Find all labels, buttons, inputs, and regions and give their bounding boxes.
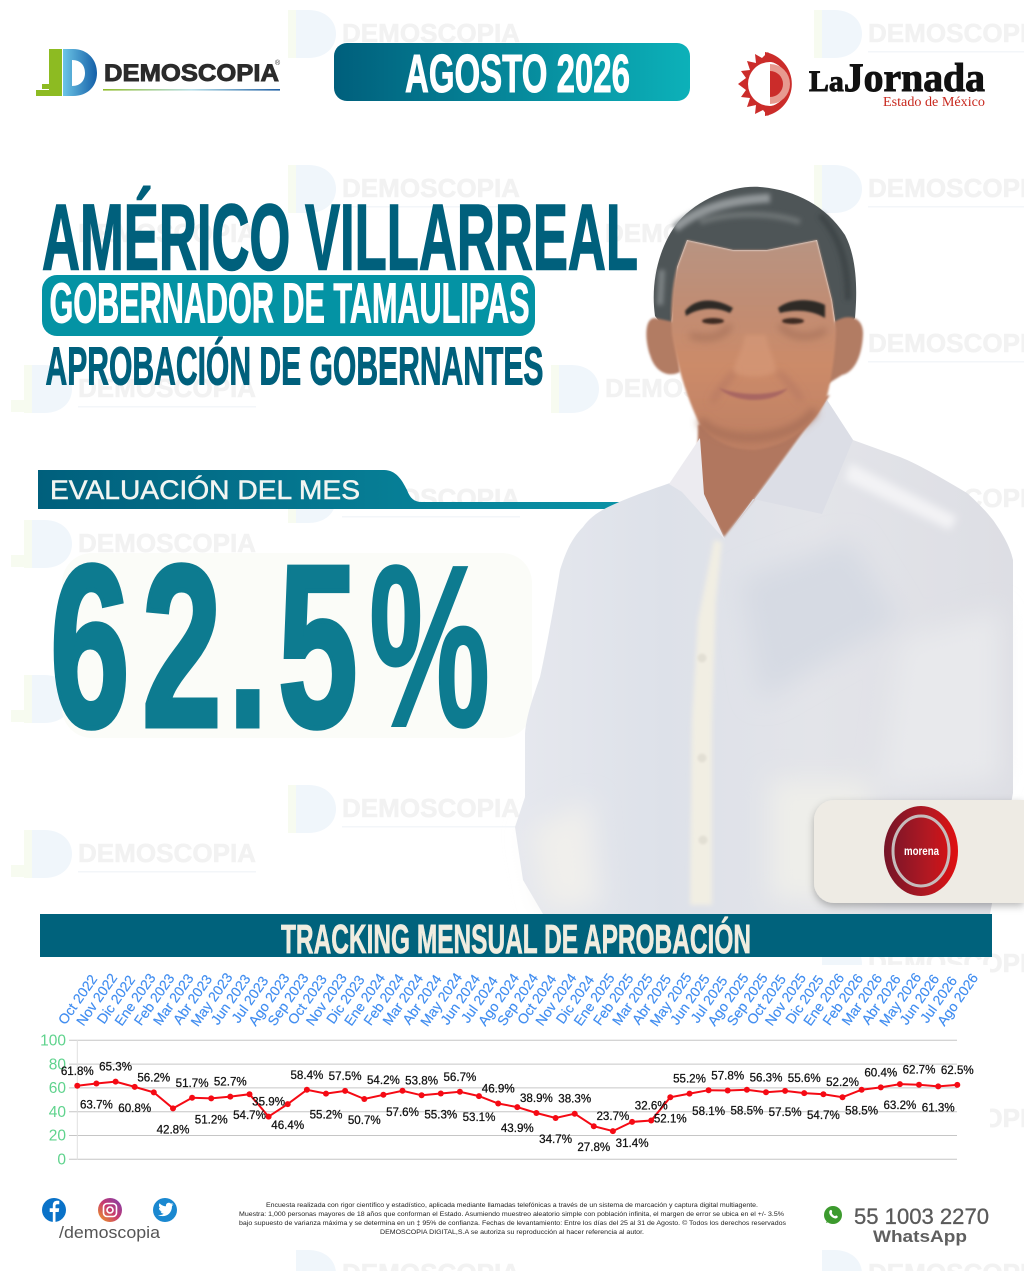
hair bbox=[654, 187, 856, 340]
subtitle pill: Gobernador de Tamaulipas: GOBERNADOR DE TAMAULIPAS bbox=[50, 272, 530, 336]
line chart: monthly approval tracking bbox=[40, 965, 990, 1170]
x axis labels: May 2023 bbox=[187, 969, 236, 1029]
x axis labels: Jul 2024 bbox=[457, 973, 501, 1026]
x axis labels: Ago 2025 bbox=[704, 970, 752, 1029]
big number: 62.5% bbox=[50, 517, 490, 776]
data labels: 32.6% bbox=[635, 1100, 668, 1112]
collar left bbox=[669, 438, 725, 540]
heading: Aprobación de gobernantes: APROBACIÓN DE GOBERNANTES bbox=[46, 336, 544, 396]
chart header bar bbox=[40, 914, 992, 962]
data labels: 53.8% bbox=[405, 1074, 438, 1087]
handle: /demoscopia bbox=[59, 1223, 161, 1242]
x axis labels: Jul 2025 bbox=[687, 973, 731, 1026]
x axis labels: Abr 2023 bbox=[169, 971, 215, 1027]
data labels: 65.3% bbox=[99, 1061, 132, 1074]
watermark pattern: DEMOSCOPIA bbox=[342, 483, 520, 513]
data labels: 54.2% bbox=[367, 1074, 400, 1087]
watermark pattern: DEMOSCOPIA bbox=[342, 18, 520, 48]
big number: 62.5%: 2 bbox=[142, 517, 222, 775]
x axis labels: Ene 2023 bbox=[111, 970, 159, 1029]
data labels: 34.7% bbox=[539, 1133, 572, 1146]
x axis labels: Sep 2023 bbox=[264, 970, 312, 1029]
x axis labels: Ago 2026 bbox=[934, 970, 981, 1029]
x axis labels: Feb 2023 bbox=[130, 970, 178, 1028]
x axis labels: Oct 2025 bbox=[743, 971, 789, 1027]
x axis labels: Ago 2024 bbox=[475, 970, 522, 1029]
data labels: 38.3% bbox=[558, 1093, 591, 1106]
watermark pattern: DEMOSCOPIA bbox=[78, 838, 256, 868]
x axis labels: Ene 2025 bbox=[570, 970, 618, 1029]
data labels bbox=[61, 1061, 974, 1154]
data labels: 58.1% bbox=[692, 1105, 725, 1118]
panel: party badge bbox=[814, 800, 1024, 903]
x axis labels: Abr 2024 bbox=[399, 971, 445, 1027]
data labels: 46.9% bbox=[482, 1082, 515, 1096]
x axis labels: Jul 2026 bbox=[917, 973, 960, 1026]
data labels: 38.9% bbox=[520, 1092, 553, 1105]
data labels: 58.4% bbox=[290, 1069, 323, 1082]
x axis labels: Nov 2025 bbox=[762, 970, 809, 1029]
data labels: 57.5% bbox=[329, 1070, 362, 1083]
data labels: 61.8% bbox=[61, 1065, 94, 1078]
x axis labels bbox=[55, 969, 981, 1029]
data labels: 23.7% bbox=[596, 1110, 629, 1123]
data labels: 27.8% bbox=[577, 1141, 610, 1154]
logo: La Jornada bbox=[738, 52, 985, 116]
hair highlights bbox=[660, 198, 848, 305]
x axis labels: May 2025 bbox=[646, 969, 695, 1029]
data labels: 54.7% bbox=[233, 1109, 266, 1122]
data labels: 52.7% bbox=[214, 1076, 247, 1089]
contact: WhatsApp bbox=[824, 1204, 989, 1246]
x axis labels: Mar 2023 bbox=[150, 970, 197, 1028]
data line bbox=[77, 1082, 957, 1131]
x axis labels: Oct 2024 bbox=[514, 971, 560, 1027]
x axis labels: Nov 2023 bbox=[302, 970, 350, 1029]
x axis labels: Sep 2025 bbox=[723, 970, 771, 1029]
nose bbox=[734, 335, 776, 377]
x axis labels: Feb 2026 bbox=[819, 970, 866, 1028]
data labels: 61.3% bbox=[922, 1101, 955, 1114]
icon: morena logo: morena bbox=[904, 846, 940, 858]
icon: facebook bbox=[42, 1198, 66, 1222]
data labels: 31.4% bbox=[616, 1137, 649, 1150]
watermark pattern: DEMOSCOPIA bbox=[342, 173, 520, 203]
data labels: 58.5% bbox=[730, 1105, 763, 1118]
methodology note: bajo supuesto de varianza máxima y se determina en un ‡ 95% de confianza. Fechas de levantamiento: Entre los días del 25 al 31 de Agosto. © Todos los derechos reservados bbox=[239, 1219, 787, 1227]
contact: WhatsApp: 55 1003 2270 bbox=[854, 1204, 989, 1229]
gridlines bbox=[69, 1040, 957, 1160]
logo: La Jornada: LaJornada bbox=[809, 55, 985, 100]
date pill: Agosto 2026: AGOSTO 2026 bbox=[405, 44, 630, 104]
y axis labels: 80 bbox=[49, 1056, 66, 1073]
watermark pattern: DEMOSCOPIA bbox=[78, 218, 256, 248]
placket bbox=[690, 540, 722, 905]
y axis labels: 0 bbox=[57, 1152, 66, 1168]
y axis labels: 40 bbox=[49, 1104, 66, 1121]
photo: governor in white shirt bbox=[515, 187, 1013, 914]
data labels: 51.7% bbox=[176, 1077, 209, 1090]
x axis labels: Jun 2025 bbox=[667, 971, 713, 1028]
mouth bbox=[719, 388, 788, 400]
data labels: 60.4% bbox=[864, 1066, 897, 1079]
data labels: 54.7% bbox=[807, 1109, 840, 1122]
data labels: 56.3% bbox=[750, 1071, 782, 1084]
tab: Evaluación del mes: EVALUACIÓN DEL MES bbox=[50, 474, 360, 505]
x axis labels: Dic 2023 bbox=[323, 972, 368, 1027]
watermark pattern: DEMOSCOPIA bbox=[605, 373, 783, 403]
big number: 62.5%: 5 bbox=[278, 517, 358, 775]
face bbox=[671, 240, 836, 450]
x axis labels: Ago 2023 bbox=[245, 970, 293, 1029]
x axis labels: Oct 2022 bbox=[55, 971, 100, 1027]
x axis labels: Abr 2026 bbox=[858, 971, 904, 1027]
data labels: 35.9% bbox=[252, 1096, 285, 1109]
data labels: 55.6% bbox=[788, 1072, 821, 1085]
ears bbox=[646, 318, 680, 374]
watermark pattern: DEMOSCOPIA bbox=[342, 793, 520, 823]
watermark pattern: DEMOSCOPIA bbox=[78, 373, 256, 403]
icon: instagram bbox=[98, 1198, 122, 1222]
big number: 62.5%: % bbox=[369, 518, 490, 776]
logo: Demoscopia bbox=[36, 49, 281, 96]
data labels: 43.9% bbox=[501, 1122, 534, 1135]
data labels: 46.4% bbox=[271, 1119, 304, 1132]
x axis labels: Jun 2024 bbox=[437, 971, 483, 1028]
x axis labels: Jul 2023 bbox=[228, 973, 272, 1026]
methodology note: Muestra: 1,000 personas mayores de 18 años que conforman el Estado. Asumiendo muestreo aleatorio simple con población infinita, el margen de error se ubica en el +/- 3.5% bbox=[239, 1211, 784, 1218]
data labels: 55.2% bbox=[310, 1109, 342, 1122]
x axis labels: Oct 2023 bbox=[284, 971, 330, 1027]
icon: whatsapp bbox=[824, 1206, 842, 1224]
logo: La Jornada: Estado de México bbox=[883, 94, 985, 109]
date pill: Agosto 2026 bbox=[334, 43, 690, 104]
x axis labels: May 2026 bbox=[876, 969, 924, 1029]
methodology note: Encuesta realizada con rigor científico y estadístico, aplicada mediante llamadas telefónicas a través de un sistema de marcación y captura digital multiagente. bbox=[266, 1202, 758, 1209]
data labels: 62.5% bbox=[941, 1064, 974, 1077]
data labels: 52.1% bbox=[654, 1112, 687, 1125]
y axis labels: 60 bbox=[49, 1080, 66, 1097]
x axis labels: Ene 2024 bbox=[341, 970, 388, 1029]
data labels: 58.5% bbox=[845, 1105, 878, 1118]
x axis labels: Mar 2024 bbox=[379, 970, 426, 1028]
x axis labels: Mar 2026 bbox=[838, 970, 885, 1028]
data labels: 62.7% bbox=[903, 1064, 935, 1077]
y axis labels: 100 bbox=[40, 1032, 66, 1050]
x axis labels: Dic 2022 bbox=[93, 972, 138, 1027]
data labels: 60.8% bbox=[118, 1102, 151, 1115]
data labels: 57.8% bbox=[711, 1070, 744, 1082]
x axis labels: Sep 2024 bbox=[494, 970, 541, 1029]
icon: twitter bbox=[153, 1198, 177, 1222]
data labels: 56.7% bbox=[443, 1071, 476, 1084]
data labels: 55.2% bbox=[673, 1073, 706, 1086]
big number: 62.5%: 6 bbox=[50, 517, 130, 775]
data labels: 56.2% bbox=[137, 1071, 170, 1084]
x axis labels: Nov 2024 bbox=[532, 970, 580, 1029]
x axis labels: Jun 2026 bbox=[896, 971, 942, 1028]
y axis labels: 20 bbox=[49, 1128, 66, 1145]
data labels: 55.3% bbox=[424, 1108, 457, 1122]
big number: 62.5%: . bbox=[228, 517, 268, 775]
tab: Evaluación del mes bbox=[38, 470, 625, 509]
data labels: 42.8% bbox=[157, 1123, 189, 1136]
face shading bbox=[690, 325, 826, 438]
watermark pattern: DEMOSCOPIA bbox=[78, 683, 256, 713]
watermark pattern: DEMOSCOPIA bbox=[78, 528, 256, 558]
x axis labels: Mar 2025 bbox=[609, 970, 656, 1028]
logo: Demoscopia: ® bbox=[275, 59, 281, 67]
x axis labels: Nov 2022 bbox=[73, 970, 120, 1029]
data labels: 57.6% bbox=[386, 1106, 419, 1119]
data labels: 53.1% bbox=[463, 1111, 495, 1124]
y axis labels bbox=[40, 1032, 66, 1168]
collar right bbox=[727, 400, 853, 535]
x axis labels: Abr 2025 bbox=[629, 971, 674, 1027]
x axis labels: Jun 2023 bbox=[207, 971, 254, 1028]
logo: Demoscopia: DEMOSCOPIA bbox=[104, 60, 279, 87]
neck bbox=[697, 395, 830, 537]
eyebrows bbox=[685, 300, 733, 316]
x axis labels: Feb 2025 bbox=[590, 970, 637, 1028]
data labels: 52.2% bbox=[826, 1076, 859, 1089]
contact: WhatsApp: WhatsApp bbox=[873, 1227, 967, 1246]
data labels: 57.5% bbox=[769, 1106, 802, 1119]
shirt bbox=[515, 400, 1013, 914]
watermark pattern: DEMOSCOPIA bbox=[605, 218, 783, 248]
icon: morena logo bbox=[884, 806, 958, 896]
data labels: 50.7% bbox=[348, 1114, 381, 1127]
methodology note: DEMOSCOPIA DIGITAL,S.A se autoriza su reproducción al hacer referencia al autor. bbox=[380, 1229, 644, 1236]
x axis labels: Ene 2026 bbox=[800, 970, 847, 1029]
data labels: 51.2% bbox=[195, 1113, 228, 1126]
x axis labels: Dic 2024 bbox=[552, 972, 597, 1027]
watermark pattern: DEMOSCOPIA bbox=[342, 638, 520, 668]
methodology note bbox=[239, 1202, 787, 1236]
data labels: 63.7% bbox=[80, 1098, 113, 1112]
x axis labels: Dic 2025 bbox=[782, 972, 827, 1027]
x axis labels: Feb 2024 bbox=[360, 970, 407, 1028]
social media block bbox=[42, 1198, 177, 1242]
data points bbox=[74, 1079, 960, 1134]
data labels: 63.2% bbox=[883, 1099, 916, 1112]
x axis labels: May 2024 bbox=[417, 969, 465, 1029]
eyes bbox=[702, 318, 724, 324]
subtitle pill: Gobernador de Tamaulipas bbox=[42, 272, 535, 336]
panel: monthly evaluation value bbox=[38, 470, 625, 776]
